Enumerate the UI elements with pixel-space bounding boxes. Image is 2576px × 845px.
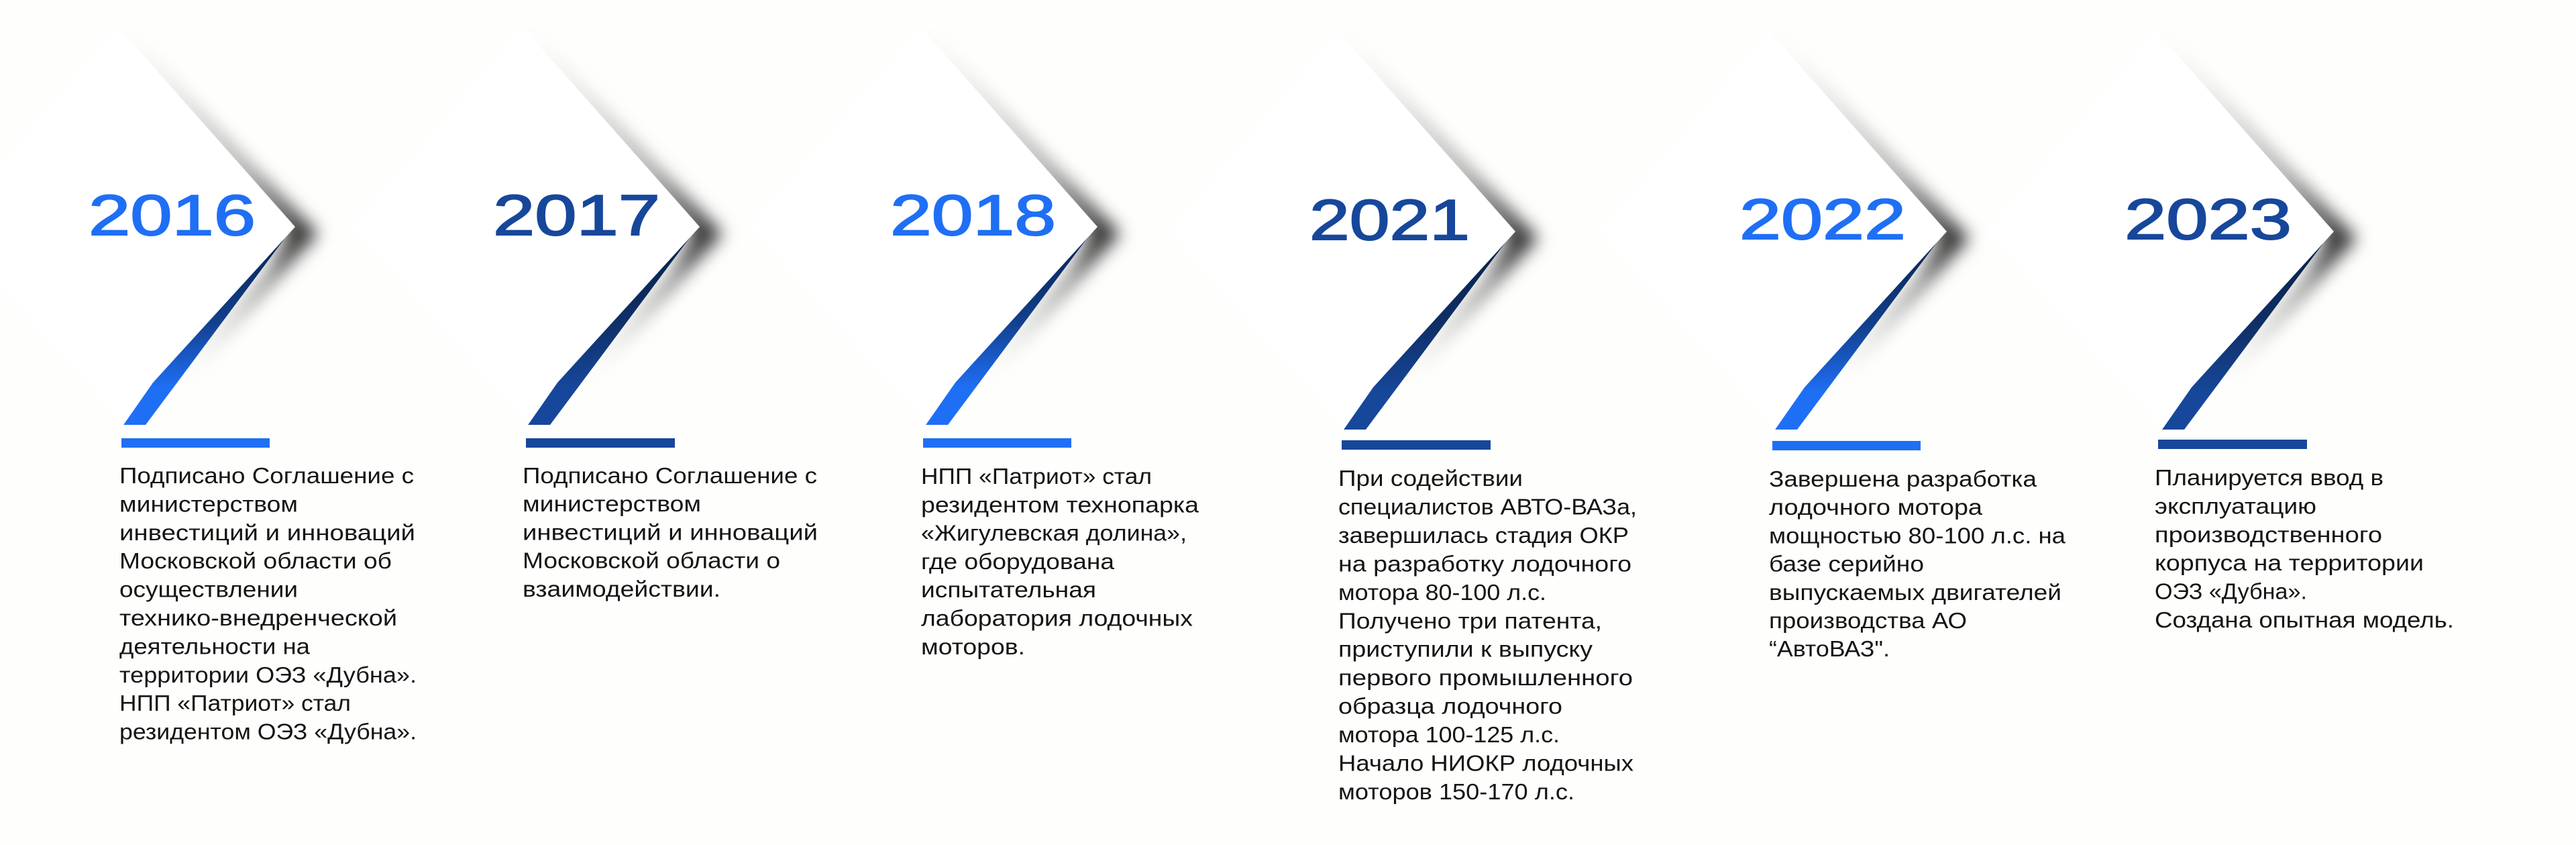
icon: chevron arrow 2022 [1598, 30, 1970, 430]
panel: 2022 [1598, 30, 2066, 661]
text block: 2016: инвестиций и инноваций [119, 520, 415, 545]
panel: 2021 [1167, 30, 1637, 804]
text block: 2017: взаимодействии. [523, 577, 720, 601]
text block: 2023: Планируется ввод в [2155, 465, 2383, 490]
text block: 2023: ОЭЗ «Дубна». [2155, 579, 2307, 604]
text block: 2022: базе серийно [1769, 552, 1924, 577]
text block: 2018: «Жигулевская долина», [921, 521, 1187, 546]
text block: 2021: При содействии [1338, 466, 1523, 491]
text block: 2016: резидентом ОЭЗ «Дубна». [119, 719, 417, 744]
text block: 2021: образца лодочного [1338, 694, 1562, 719]
text block: 2016: Подписано Соглашение с [119, 463, 414, 488]
icon: chevron arrow 2021 [1167, 30, 1538, 430]
year 2017: 2017 [493, 184, 660, 248]
text block: 2022: мощностью 80-100 л.с. на [1769, 523, 2066, 548]
text block: 2016: технико-внедренческой [119, 605, 397, 630]
text block: 2016: министерством [119, 491, 298, 516]
icon: chevron arrow 2023 [1985, 30, 2357, 430]
text block: 2021: первого промышленного [1338, 665, 1633, 690]
text block: 2022: выпускаемых двигателей [1769, 580, 2061, 605]
text block: 2017: Московской области о [523, 548, 780, 573]
text block: 2023: эксплуатацию [2155, 493, 2316, 518]
text block: 2023: Создана опытная модель. [2155, 607, 2454, 632]
panel: 2017 [351, 26, 818, 601]
text block: 2018 [921, 464, 1199, 659]
icon: chevron arrow 2018 [749, 26, 1120, 425]
text block: 2022: “АвтоВАЗ". [1769, 636, 1890, 661]
panel: 2023 [1985, 30, 2454, 632]
text block: 2018: испытательная [921, 577, 1096, 602]
year 2022: 2022 [1739, 188, 1906, 252]
text block: 2022: лодочного мотора [1769, 495, 1983, 519]
year 2023: 2023 [2125, 188, 2292, 252]
text block: 2016 [119, 463, 417, 744]
year 2016: 2016 [89, 184, 256, 248]
accent bar [1342, 440, 1491, 450]
text block: 2021: приступили к выпуску [1338, 637, 1593, 662]
text block: 2018: где оборудована [921, 549, 1115, 574]
accent bar [526, 438, 675, 448]
text block: 2016: территории ОЭЗ «Дубна». [119, 662, 417, 687]
year 2021: 2021 [1309, 189, 1470, 252]
text block: 2023 [2155, 465, 2454, 632]
text block: 2016: деятельности на [119, 634, 311, 658]
text block: 2021 [1338, 466, 1637, 804]
text block: 2018: моторов. [921, 634, 1025, 659]
text block: 2018: лаборатория лодочных [921, 605, 1193, 631]
text block: 2018: НПП «Патриот» стал [921, 464, 1152, 489]
accent bar [121, 438, 270, 448]
text block: 2021: завершилась стадия ОКР [1338, 523, 1629, 548]
text block: 2016: осуществлении [119, 577, 298, 602]
year 2018: 2018 [890, 184, 1056, 248]
panel: 2018 [749, 26, 1199, 659]
text block: 2023: производственного [2155, 522, 2382, 547]
text block: 2021: Получено три патента, [1338, 608, 1602, 633]
text block: 2017: инвестиций и инноваций [523, 519, 818, 544]
text block: 2017 [523, 463, 818, 601]
text block: 2022: Завершена разработка [1769, 466, 2037, 491]
accent bar [2158, 440, 2307, 449]
icon: chevron arrow 2016 [0, 26, 318, 425]
text block: 2017: министерством [523, 491, 701, 516]
accent bar [1772, 441, 1921, 450]
text block: 2021: мотора 80-100 л.с. [1338, 580, 1546, 605]
text block: 2021: на разработку лодочного [1338, 551, 1631, 576]
text block: 2016: Московской области об [119, 548, 392, 573]
text block: 2016: НПП «Патриот» стал [119, 691, 351, 715]
text block: 2021: моторов 150-170 л.с. [1338, 779, 1574, 804]
text block: 2017: Подписано Соглашение с [523, 463, 817, 488]
text block: 2022: производства АО [1769, 608, 1967, 633]
panel: 2016 [0, 26, 417, 744]
text block: 2022 [1769, 466, 2066, 661]
accent bar [923, 438, 1071, 448]
text block: 2023: корпуса на территории [2155, 550, 2424, 575]
text block: 2018: резидентом технопарка [921, 492, 1199, 517]
text block: 2021: Начало НИОКР лодочных [1338, 750, 1634, 776]
text block: 2021: мотора 100-125 л.с. [1338, 722, 1560, 747]
icon: chevron arrow 2017 [351, 26, 722, 425]
text block: 2021: специалистов АВТО-ВАЗа, [1338, 494, 1637, 519]
